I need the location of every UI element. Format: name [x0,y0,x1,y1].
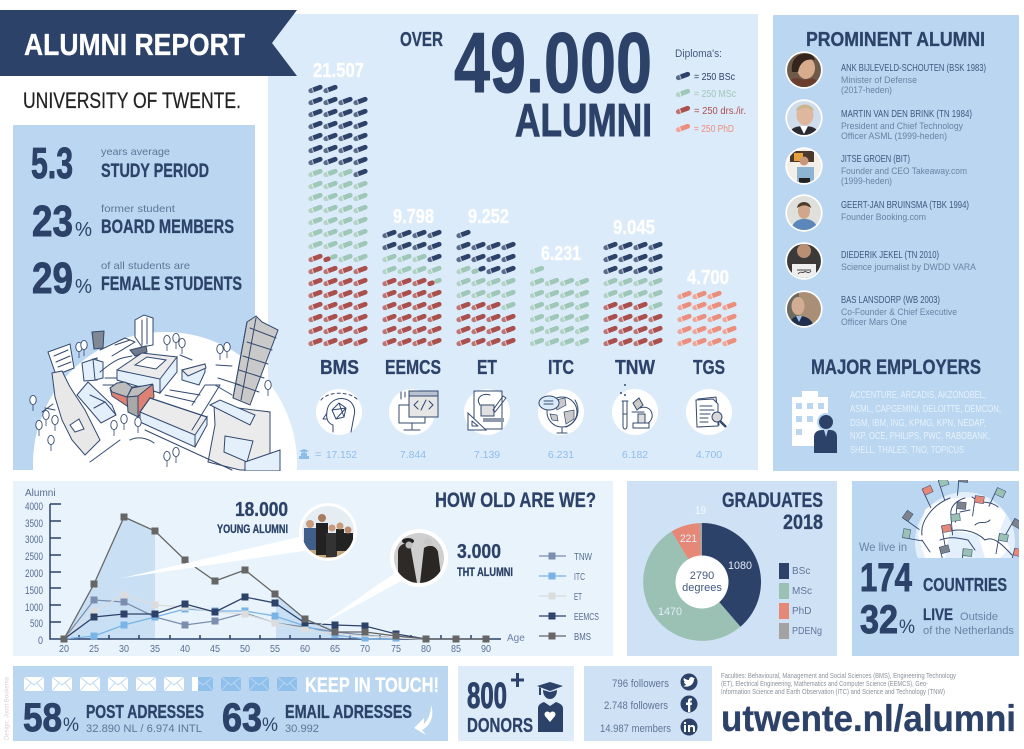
text: 800+ donors [467,673,533,737]
chart: alumni by age: 60 [300,643,310,655]
donut chart: degrees [643,505,761,641]
column: TGS diplomas [677,267,737,347]
faculty labels: TNW [615,357,655,379]
numbers: current alumni per faculty: 6.182 [622,449,648,461]
legend: degree types: PDENg [792,626,822,637]
column: ET diplomas [456,206,516,347]
alumnus: Diederik Jekel: Science journalist by DWDD VARA [841,262,976,272]
chart: alumni by age: 50 [240,643,250,655]
icon: building and businessman [792,391,837,453]
legend: diploma types: = 250 drs./ir. [694,106,746,117]
stat: board members: former student [101,203,175,215]
numbers: current alumni per faculty: 6.231 [548,449,574,461]
chart: alumni by age: 1000 [25,602,43,614]
alumnus: Jitse Groen [785,147,967,186]
alumnus: Bas Lansdorp: BAS LANSDORP (WB 2003) [841,294,940,306]
stat: email addresses: EMAIL ADRESSES [285,702,412,722]
icon: EEMCS code window [389,389,438,435]
chart: alumni by age: 25 [89,643,99,655]
alumnus: Jitse Groen: (1999-heden) [841,176,892,186]
text: 32% live outside [860,598,1015,642]
chart: alumni by age: 20 [59,643,69,655]
chart: alumni by age: 500 [30,618,43,630]
alumnus: Ank Bijleveld-Schouten: (2017-heden) [841,85,892,95]
heading: graduates 2018: GRADUATES [722,489,823,512]
legend: faculties in chart: TNW [574,551,592,563]
faculty labels: ET [477,357,497,379]
text: 32% live outside: Outside [960,611,998,623]
heading: graduates 2018 [722,489,823,534]
alumnus: Ank Bijleveld-Schouten [785,51,986,95]
legend: diploma types [675,48,746,135]
chart: alumni by age: 4000 [25,501,43,513]
column: ET diplomas: 9.252 [468,206,509,228]
chart: alumni by age: 85 [451,643,461,655]
heading: keep in touch: KEEP IN TOUCH! [305,674,439,697]
numbers: current alumni per faculty: 17.152 [326,449,357,461]
text: 174 countries: 174 [860,556,913,600]
stat: post addresses: 58 [23,696,62,740]
legend: diploma types: = 250 PhD [694,124,734,135]
alumnus: Bas Lansdorp: Officer Mars One [841,317,907,327]
stat: post addresses: 32.890 NL / 6.974 INTL [86,723,202,735]
callout: 18.000 young alumni: 18.000 [235,499,288,521]
heading: graduates 2018: 2018 [783,511,823,534]
stat: female students: of all students are [101,260,190,272]
chart: alumni by age: 70 [360,643,370,655]
column: TGS diplomas: 4.700 [687,267,729,289]
stat: post addresses [23,696,204,740]
heading: over 49.000 alumni: ALUMNI [515,94,652,146]
chart: alumni by age: 45 [210,643,220,655]
stat: email addresses: 63 [222,696,262,740]
legend: degree types [779,563,822,639]
column: ITC diplomas [529,243,590,347]
text: 32% live outside: 32 [860,598,898,642]
column: BMS diplomas [308,60,368,347]
alumnus: Martin van den Brink [785,99,972,141]
chart: alumni by age: 65 [330,643,340,655]
chart: alumni by age: 55 [270,643,280,655]
alumnus: Ank Bijleveld-Schouten: Minister of Defense [841,75,917,85]
numbers: current alumni per faculty: 4.700 [696,449,722,461]
alumnus: Bas Lansdorp [785,290,957,328]
chart: alumni by age: 3000 [25,534,43,546]
text: 32% live outside: LIVE [923,605,953,624]
heading: major employers: MAJOR EMPLOYERS [811,356,981,379]
text: faculties note: (ET), Electrical Engineering, Mathematics and Computer Science (EEMCS), Geo- [721,679,928,688]
legend: faculties in chart: ITC [574,571,585,583]
chart: alumni by age: 0 [38,635,43,647]
callout: 18.000 young alumni [122,499,357,578]
column: EEMCS diplomas: 9.798 [393,206,434,228]
text: 32% live outside: of the Netherlands [923,625,1015,637]
stat: post addresses: % [63,715,79,736]
chart: alumni by age: 1500 [25,585,43,597]
text: employer list: SHELL, THALES, TNO, TOPICUS [850,445,964,456]
heading: over 49.000 alumni [400,16,652,146]
panel: graduates 2018 [627,481,837,656]
panel: main alumni pictogram chart [268,14,758,470]
chart: alumni by age: 30 [119,643,129,655]
banner: alumni report [0,10,297,76]
alumnus: Diederik Jekel: DIEDERIK JEKEL (TN 2010) [841,249,939,261]
panel: countries [852,475,1024,656]
chart: alumni by age: 90 [481,643,491,655]
column: TNW diplomas: 9.045 [613,217,655,239]
icon: TNW microscope [612,384,658,435]
chart: alumni by age: 80 [421,643,431,655]
text: employer list [850,390,1001,456]
arrow: curved white [414,705,432,735]
social: twitter: 796 followers [612,678,669,690]
faculty labels [320,357,725,379]
stat: female students: 29 [32,254,73,303]
faculty labels: TGS [693,357,725,379]
text: 800+ donors: 800 [467,675,507,716]
stat: board members [32,197,234,246]
alumnus: Geert-Jan Bruinsma [785,194,969,232]
legend: diploma types: = 250 MSc [694,89,736,100]
donut chart: degrees: 1470 [658,606,682,618]
stat: board members: 23 [32,197,73,246]
stat: female students: FEMALE STUDENTS [101,274,242,295]
alumnus: Geert-Jan Bruinsma: GEERT-JAN BRUINSMA (TBK 1994) [841,199,969,211]
alumnus: Martin van den Brink: President and Chief Technology [841,121,963,131]
stat: study period: STUDY PERIOD [101,161,209,182]
icon: ITC globe [538,389,584,435]
text: faculties note [721,671,956,696]
text: 174 countries: We live in [859,540,907,554]
panel: key statistics [13,125,255,470]
legend: degree types: MSc [792,586,812,597]
alumnus: Bas Lansdorp: Co-Founder & Chief Executive [841,307,957,317]
panel: age line chart [13,481,613,656]
callout: 3.000 THT alumni: 3.000 [457,541,501,563]
numbers: current alumni per faculty [299,449,722,461]
icons: envelopes [24,677,297,691]
panel: social media [584,666,712,741]
stat: post addresses: POST ADRESSES [86,702,204,722]
alumnus: Martin van den Brink: Officer ASML (1999-heden) [841,131,947,141]
alumnus: Geert-Jan Bruinsma: Founder Booking.com [841,212,926,222]
stat: email addresses: % [262,715,278,736]
donut chart: degrees: 19 [695,505,706,517]
chart: alumni by age: 75 [391,643,401,655]
faculty labels: ITC [548,357,574,379]
title: ALUMNI REPORT [24,27,245,62]
legend: faculties in chart [539,551,599,643]
text: 32% live outside: % [899,617,915,638]
stat: study period: years average [101,146,170,158]
social: linkedin: 14.987 members [600,723,671,735]
legend: diploma types: Diploma's: [675,48,722,60]
social: facebook: 2.748 followers [604,700,668,712]
alumnus: Martin van den Brink: MARTIN VAN DEN BRINK (TN 1984) [841,108,972,120]
icon: graduate with heart [537,682,563,732]
chart: alumni by age: Age [507,633,525,644]
legend: faculties in chart: ET [574,591,582,603]
donut chart: degrees: 1080 [728,560,752,572]
icon: ET drawing tools [464,389,510,435]
legend: faculties in chart: BMS [574,631,591,643]
donut chart: degrees: degrees [682,582,722,594]
column: ITC diplomas: 6.231 [541,243,581,265]
chart: alumni by age: 3500 [25,518,43,530]
icon: BMS head with network [316,389,362,435]
text: faculties note: Faculties: Behavioural, Management and Social Sciences (BMS), Engineering Technology [721,671,956,680]
credit: designer: Design: Joost Boukema [4,677,10,740]
stat: email addresses [222,696,412,740]
stat: board members: % [75,219,92,241]
column: TNW diplomas [603,217,663,347]
numbers: current alumni per faculty: 7.844 [400,449,426,461]
heading: over 49.000 alumni: OVER [400,29,443,51]
column: EEMCS diplomas [382,206,442,347]
alumnus: Jitse Groen: Founder and CEO Takeaway.com [841,166,967,176]
callout: 18.000 young alumni: YOUNG ALUMNI [217,522,288,536]
donut chart: degrees: 221 [680,533,697,545]
chart: alumni by age: 2500 [25,551,43,563]
numbers: current alumni per faculty: = [315,449,321,461]
heading: prominent alumni: PROMINENT ALUMNI [806,29,985,51]
subtitle: university of twente: UNIVERSITY OF TWENTE. [23,88,241,113]
column: BMS diplomas: 21.507 [313,60,364,82]
stat: study period [31,139,209,188]
heading: over 49.000 alumni: 49.000 [454,16,652,111]
legend: faculties in chart: EEMCS [574,611,599,623]
callout: 3.000 THT alumni [317,529,513,627]
illustration: globe with flags [902,480,1019,558]
donut chart: degrees: 2790 [690,570,714,582]
faculty labels: BMS [320,357,359,379]
text: 800+ donors: DONORS [467,715,533,737]
chart: alumni by age: Alumni [25,488,56,499]
stat: study period: 5.3 [31,139,73,188]
numbers: current alumni per faculty: 7.139 [474,449,500,461]
stat: female students: % [75,276,92,298]
stat: female students [32,254,242,303]
stat: board members: BOARD MEMBERS [101,217,234,238]
callout: 3.000 THT alumni: THT ALUMNI [457,565,513,579]
heading: how old are we: HOW OLD ARE WE? [435,489,596,512]
chart: alumni by age: 35 [150,643,160,655]
text: employer list: DSM, IBM, ING, KPMG, KPN, NEDAP, [850,418,986,429]
chart: alumni by age: 2000 [25,568,43,580]
stat: email addresses: 30.992 [285,723,319,735]
panel: keep in touch [13,666,448,741]
faculty labels: EEMCS [385,357,441,379]
panel: donors [458,666,574,741]
legend: degree types: PhD [792,606,811,617]
chart: alumni by age: 40 [180,643,190,655]
chart: alumni by age [25,488,525,655]
icon: TGS document with magnifier [686,389,732,435]
illustration: campus buildings [29,314,297,471]
panel: prominent alumni and employers [773,15,1019,471]
legend: diploma types: = 250 BSc [694,72,735,83]
alumnus: Jitse Groen: JITSE GROEN (BIT) [841,153,910,165]
legend: degree types: BSc [792,566,810,577]
text: faculties note: Information Science and Earth Observation (ITC) and Science and Technology (TNW) [721,687,945,696]
text: 174 countries [859,540,1007,600]
alumnus: Diederik Jekel [785,242,976,280]
